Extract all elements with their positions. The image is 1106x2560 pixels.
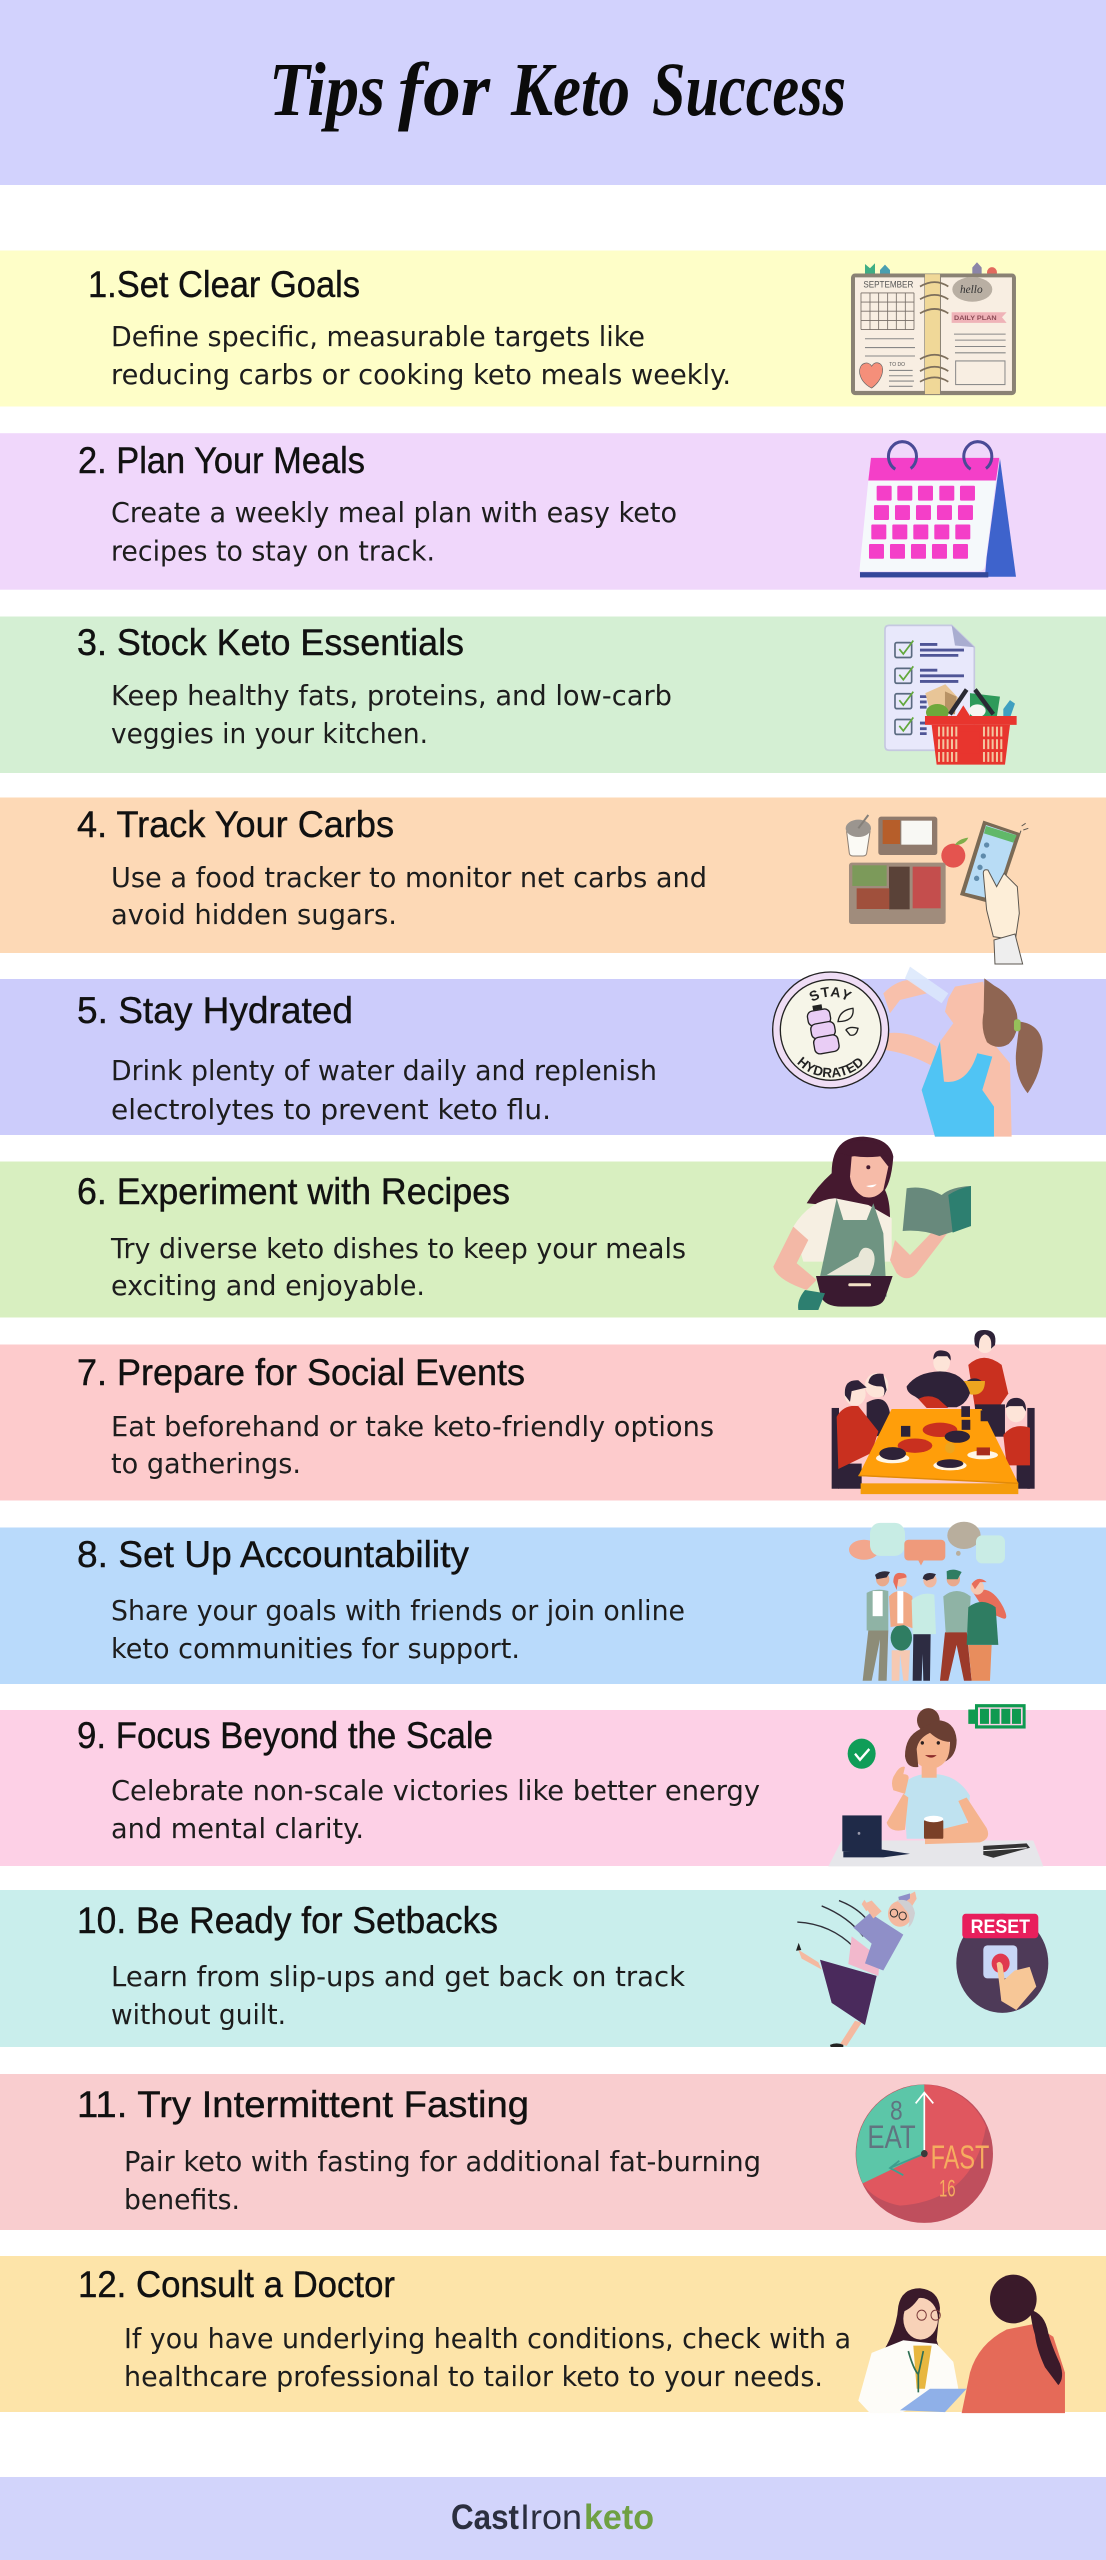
heading 3: 3. Stock Keto Essentials: [77, 622, 464, 663]
heading 4: 4. Track Your Carbs: [77, 804, 394, 845]
icon: planner notebook: SEPTEMBER: [863, 279, 914, 290]
body text 5: electrolytes to prevent keto flu.: [111, 1094, 551, 1126]
body text 6: Try diverse keto dishes to keep your meals: [110, 1233, 686, 1265]
panel: 1 set clear goals: [0, 250, 1106, 406]
panel: 3 stock keto essentials: [0, 616, 1106, 773]
panel: 2 plan your meals: [0, 433, 1106, 590]
heading 11: 11. Try Intermittent Fasting: [77, 2084, 529, 2125]
icon: family dinner table: [832, 1330, 1035, 1494]
footer brand: Cast: [451, 2498, 519, 2537]
heading 7: 7. Prepare for Social Events: [77, 1352, 525, 1393]
footer brand: [451, 2498, 654, 2537]
footer brand: keto: [584, 2498, 654, 2537]
body text 12: [124, 2323, 851, 2393]
heading 9: 9. Focus Beyond the Scale: [77, 1715, 493, 1756]
heading 1: 1.Set Clear Goals: [88, 264, 360, 305]
panel: 10 be ready for setbacks: [0, 1890, 1106, 2047]
footer banner: [0, 2477, 1106, 2560]
icon: planner notebook: DAILY PLAN: [954, 315, 997, 322]
body text 7: Eat beforehand or take keto-friendly options: [111, 1411, 714, 1443]
heading 8: 8. Set Up Accountability: [77, 1534, 469, 1575]
icon: woman drinking and stay hydrated badge: [772, 966, 1043, 1137]
icon: planner notebook: hello: [960, 283, 983, 296]
panel: 4 track your carbs: [0, 798, 1106, 964]
body text 4: [111, 862, 707, 931]
body text 10: [111, 1961, 685, 2031]
body text 1: Define specific, measurable targets like: [111, 321, 645, 353]
icon: woman drinking and stay hydrated badge: HYDRATED: [797, 1056, 862, 1078]
body text 7: [111, 1411, 714, 1480]
title: Tips: [269, 48, 385, 132]
body text 1: [111, 321, 731, 391]
icon: woman slipping and reset button: [796, 1892, 1048, 2047]
body text 2: [111, 497, 677, 568]
icon: woman cooking with a recipe book: [773, 1137, 971, 1310]
icon: 16:8 fasting clock: 16: [939, 2175, 956, 2202]
header banner: [0, 0, 1106, 185]
heading 6: 6. Experiment with Recipes: [77, 1171, 510, 1212]
icon: doctor with patient: [858, 2275, 1065, 2413]
heading 2: 2. Plan Your Meals: [78, 440, 365, 481]
body text 4: Use a food tracker to monitor net carbs and: [111, 862, 707, 894]
body text 8: Share your goals with friends or join online: [111, 1595, 685, 1627]
panel: 9 focus beyond the scale: [0, 1704, 1106, 1866]
body text 10: without guilt.: [111, 1999, 286, 2031]
icon: 16:8 fasting clock: 8: [890, 2095, 903, 2126]
title: for: [398, 48, 491, 132]
body text 9: and mental clarity.: [111, 1813, 364, 1845]
heading 12: 12. Consult a Doctor: [78, 2264, 395, 2305]
icon: woman slipping and reset button: RESET: [971, 1915, 1031, 1937]
body text 10: Learn from slip-ups and get back on track: [111, 1961, 685, 1993]
body text 11: [124, 2146, 761, 2216]
icon: 16:8 fasting clock: EAT: [867, 2119, 916, 2155]
heading 5: 5. Stay Hydrated: [77, 990, 353, 1031]
body text 1: reducing carbs or cooking keto meals weekly.: [111, 359, 731, 391]
body text 12: If you have underlying health conditions, check with a: [124, 2323, 851, 2355]
body text 9: [111, 1775, 760, 1845]
body text 5: Drink plenty of water daily and replenish: [111, 1055, 657, 1087]
body text 6: exciting and enjoyable.: [111, 1270, 425, 1302]
body text 4: avoid hidden sugars.: [111, 899, 397, 931]
heading 10: 10. Be Ready for Setbacks: [77, 1900, 498, 1941]
icon: woman drinking and stay hydrated badge: STAY: [810, 986, 852, 1001]
body text 8: keto communities for support.: [111, 1633, 520, 1665]
body text 5: [111, 1055, 657, 1126]
body text 11: Pair keto with fasting for additional fat-burning: [124, 2146, 761, 2178]
panel: 12 consult a doctor: [0, 2256, 1106, 2413]
body text 7: to gatherings.: [111, 1448, 301, 1480]
panel: 11 try intermittent fasting: [0, 2074, 1106, 2230]
body text 3: Keep healthy fats, proteins, and low-carb: [111, 680, 672, 712]
panel: 5 stay hydrated: [0, 966, 1106, 1137]
icon: checklist and grocery basket: [885, 625, 1017, 765]
body text 9: Celebrate non-scale victories like better energy: [111, 1775, 760, 1807]
icon: planner notebook: TO DO: [889, 362, 905, 368]
body text 12: healthcare professional to tailor keto to your needs.: [124, 2361, 823, 2393]
panel: 7 prepare for social events: [0, 1330, 1106, 1500]
body text 11: benefits.: [124, 2184, 240, 2216]
icon: group of people talking: [849, 1522, 1006, 1681]
body text 3: [111, 680, 672, 750]
body text 3: veggies in your kitchen.: [111, 718, 428, 750]
icon: 16:8 fasting clock: FAST: [931, 2139, 989, 2176]
icon: 16:8 fasting clock: [856, 2084, 993, 2223]
body text 8: [111, 1595, 685, 1665]
footer brand: Iron: [520, 2498, 582, 2537]
panel: 8 set up accountability: [0, 1522, 1106, 1684]
icon: happy woman at desk with battery and check: [828, 1704, 1043, 1866]
body text 6: [110, 1233, 686, 1302]
body text 2: Create a weekly meal plan with easy keto: [111, 497, 677, 529]
icon: desk calendar: [859, 442, 1016, 577]
title: Keto: [510, 48, 630, 132]
icon: planner notebook: [851, 262, 1016, 395]
panel: 6 experiment with recipes: [0, 1137, 1106, 1318]
title: Success: [652, 48, 846, 132]
icon: food boxes and phone tracker: [846, 815, 1028, 964]
title: [269, 48, 846, 132]
body text 2: recipes to stay on track.: [111, 536, 435, 568]
